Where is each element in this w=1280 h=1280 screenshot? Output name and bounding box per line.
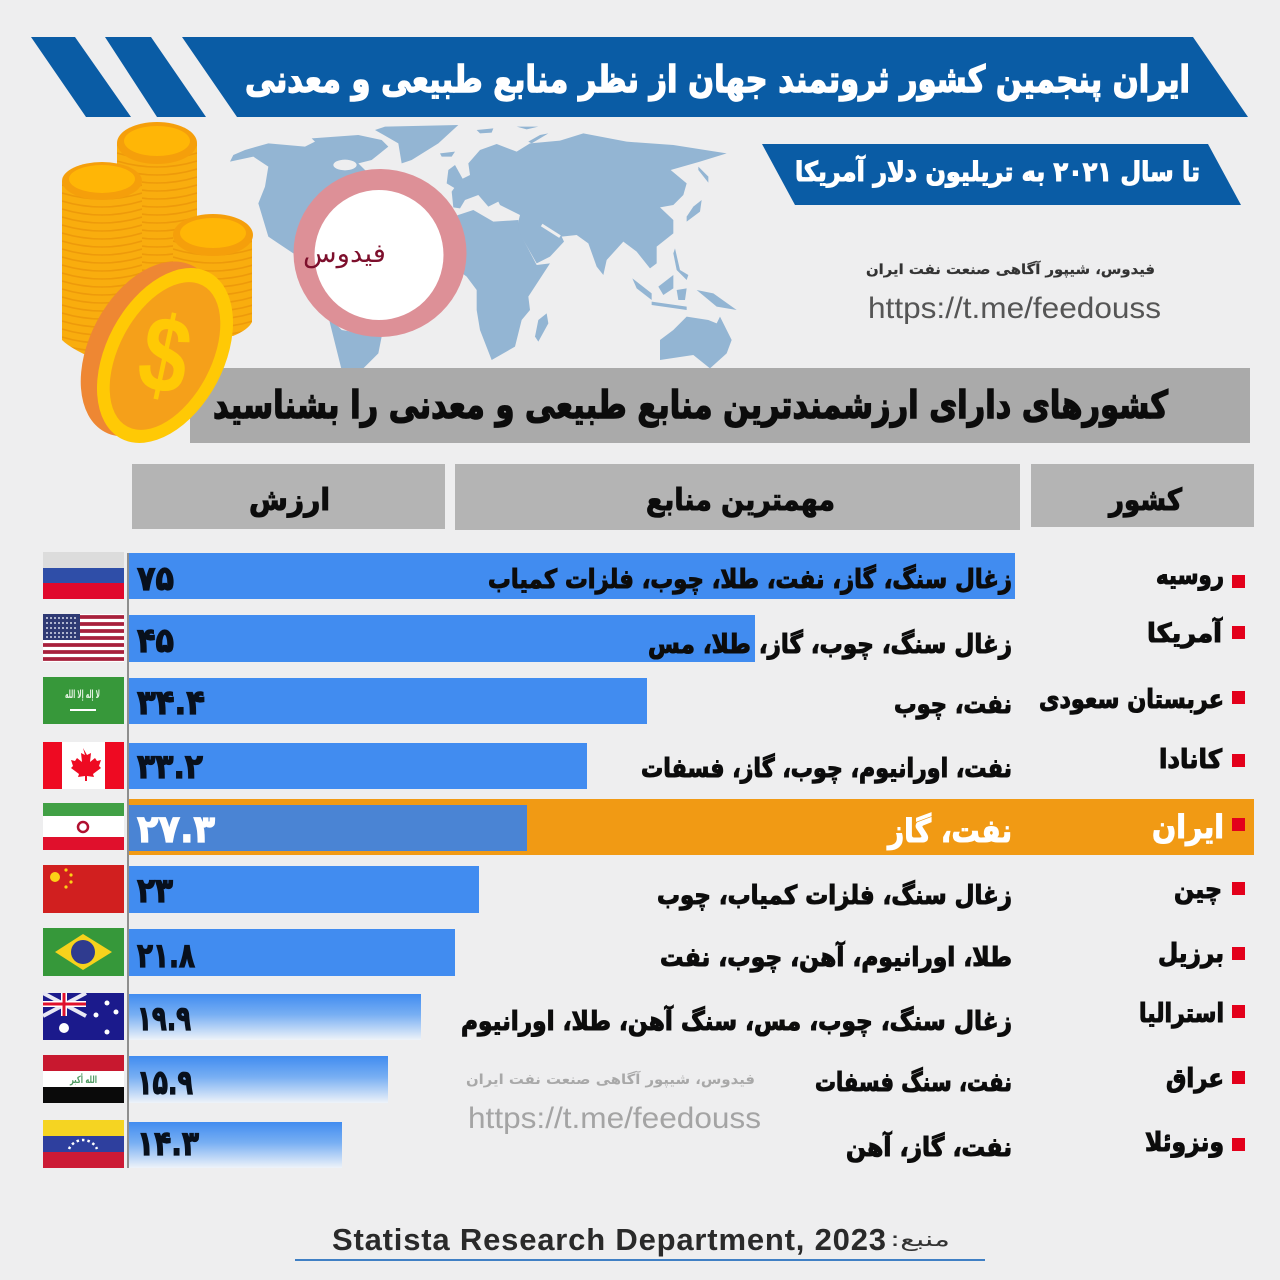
coin stack right bbox=[173, 214, 253, 336]
row: Saudi Arabia: نفت، چوب bbox=[894, 690, 1012, 720]
flag: Canada bbox=[43, 742, 124, 789]
row: China bbox=[43, 865, 1245, 913]
row: Russia: ۷۵ bbox=[137, 559, 174, 599]
row: Brazil bbox=[43, 928, 1245, 976]
icon: gold coins bbox=[53, 122, 261, 466]
source line: Statista Research Department, 2023 bbox=[332, 1222, 886, 1257]
row: USA: ۴۵ bbox=[137, 621, 174, 661]
flag: Australia bbox=[43, 993, 124, 1040]
credit text lower watermark bbox=[466, 1070, 761, 1135]
row: Canada: ۳۳.۲ bbox=[137, 747, 203, 787]
flag: Venezuela bbox=[43, 1120, 124, 1168]
row: Russia: روسیه bbox=[1156, 561, 1224, 591]
row: Venezuela: ونزوئلا bbox=[1145, 1128, 1224, 1158]
row: Venezuela: نفت، گاز، آهن bbox=[846, 1131, 1012, 1163]
credit text lower watermark: فیدوس، شیپور آگاهی صنعت نفت ایران bbox=[466, 1070, 755, 1088]
row: Australia: زغال سنگ، چوب، مس، سنگ آهن، طلا، اورانیوم bbox=[461, 1005, 1012, 1037]
credit text top bbox=[866, 260, 1161, 325]
row: Iraq: ۱۵.۹ bbox=[137, 1063, 193, 1103]
row: USA: زغال سنگ، چوب، گاز، طلا، مس bbox=[648, 629, 1012, 660]
row: China: ۲۳ bbox=[137, 871, 173, 911]
row: Brazil: ۲۱.۸ bbox=[137, 936, 195, 976]
row: Saudi Arabia: عربستان سعودی bbox=[1039, 685, 1224, 715]
row: Iran highlighted: نفت، گاز bbox=[886, 812, 1012, 850]
row: Saudi Arabia: ۳۴.۴ bbox=[137, 683, 205, 723]
row: Iran highlighted: ۲۷.۳ bbox=[137, 807, 215, 851]
dollar coin bbox=[53, 238, 261, 466]
chart axis bbox=[127, 553, 129, 1168]
row: Australia bbox=[43, 993, 1245, 1040]
flag: Russia bbox=[43, 552, 124, 599]
row: Canada: نفت، اورانیوم، چوب، گاز، فسفات bbox=[641, 753, 1012, 784]
table header: value: ارزش bbox=[249, 483, 330, 518]
flag: Brazil bbox=[43, 928, 124, 976]
subtitle banner bbox=[762, 144, 1241, 205]
logo: brush ring bbox=[294, 169, 466, 337]
row: Russia bbox=[43, 552, 1245, 599]
logo: brush ring: فیدوس bbox=[303, 239, 386, 269]
row: Canada bbox=[43, 742, 1245, 789]
title banner bbox=[182, 37, 1248, 117]
table header: country: کشور bbox=[1107, 483, 1182, 518]
flag: Saudi Arabia: لا إله إلا الله bbox=[65, 688, 100, 701]
flag: Iraq bbox=[43, 1055, 124, 1103]
row: Canada: کانادا bbox=[1159, 745, 1223, 775]
row: Iraq bbox=[43, 1055, 1245, 1103]
row: Venezuela bbox=[43, 1120, 1245, 1168]
subtitle banner: تا سال ۲۰۲۱ به تریلیون دلار آمریکا bbox=[795, 155, 1200, 188]
row: Saudi Arabia bbox=[43, 677, 1245, 724]
flag: China bbox=[43, 865, 124, 913]
row: Venezuela: ۱۴.۳ bbox=[137, 1124, 199, 1164]
table header: country bbox=[1031, 464, 1254, 527]
world map bbox=[230, 125, 737, 370]
credit text top: https://t.me/feedouss bbox=[868, 292, 1161, 325]
row: Iraq: نفت، سنگ فسفات bbox=[815, 1067, 1012, 1098]
credit text top: فیدوس، شیپور آگاهی صنعت نفت ایران bbox=[866, 260, 1155, 278]
row: Iraq: عراق bbox=[1166, 1064, 1224, 1094]
row: Iran highlighted: ایران bbox=[1152, 808, 1224, 846]
flag: Iran bbox=[43, 803, 124, 850]
coin stack rear bbox=[117, 122, 197, 330]
decorative stripes bbox=[31, 37, 206, 117]
table header: main resources bbox=[455, 464, 1020, 530]
flag: Iraq: الله أكبر bbox=[69, 1073, 97, 1086]
row: Russia: زغال سنگ، گاز، نفت، طلا، چوب، فلزات کمیاب bbox=[488, 564, 1012, 595]
row: Australia: استرالیا bbox=[1139, 999, 1224, 1029]
table header: main resources: مهمترین منابع bbox=[646, 483, 835, 518]
row: USA bbox=[43, 614, 1245, 662]
flag: USA bbox=[43, 614, 124, 662]
row: China: زغال سنگ، فلزات کمیاب، چوب bbox=[657, 880, 1012, 911]
row: Brazil: برزیل bbox=[1158, 939, 1224, 969]
row: China: چین bbox=[1174, 875, 1222, 905]
flag: Saudi Arabia bbox=[43, 677, 124, 724]
table header: value bbox=[132, 464, 445, 529]
row: Australia: ۱۹.۹ bbox=[137, 999, 191, 1039]
coin stack left bbox=[62, 162, 142, 362]
section heading band bbox=[190, 368, 1250, 443]
row: Brazil: طلا، اورانیوم، آهن، چوب، نفت bbox=[660, 941, 1012, 973]
dollar coin: $ bbox=[129, 290, 201, 419]
source line: منبع: bbox=[890, 1227, 950, 1251]
row: Iran highlighted bbox=[43, 799, 1254, 855]
credit text lower watermark: https://t.me/feedouss bbox=[468, 1102, 761, 1135]
row: USA: آمریکا bbox=[1147, 617, 1223, 649]
